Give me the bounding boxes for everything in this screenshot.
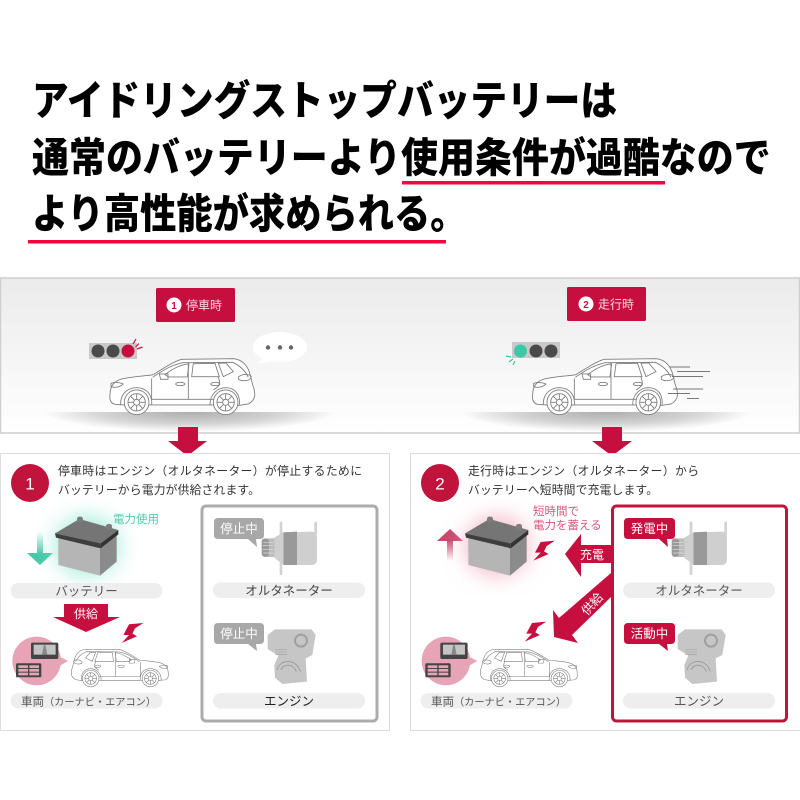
label pill: alternator <box>213 582 365 598</box>
bubble: generating: 発電中 <box>631 521 668 536</box>
glow: battery <box>467 519 527 573</box>
badge: stopped: 停車時 <box>186 298 222 312</box>
glow: battery <box>57 519 117 573</box>
speed lines <box>668 367 710 398</box>
label pill: engine: エンジン <box>264 694 314 708</box>
title underline: second line <box>28 240 446 244</box>
title: アイドリングストップバッテリーは <box>32 78 617 124</box>
bubble: active <box>624 623 675 651</box>
number badge 2: 2 <box>435 474 445 494</box>
panel: scene overview <box>0 278 800 433</box>
description text <box>58 464 362 497</box>
label pill: battery: バッテリー <box>55 584 118 598</box>
box: alternator and engine active <box>612 506 786 721</box>
bubble: stopped: 停止中 <box>220 521 258 536</box>
car: vehicle <box>480 649 577 687</box>
label: store power: 短時間で <box>533 505 579 518</box>
arrow: supply: 供給 <box>74 607 98 621</box>
box: alternator and engine stopped <box>202 506 377 721</box>
icon: alternator <box>262 522 317 575</box>
icon: navigation and air conditioner <box>12 637 68 685</box>
arrow: down to panel 2 <box>592 427 632 456</box>
icon: green traffic light <box>506 342 560 365</box>
panel 2: driving <box>410 454 800 730</box>
icon: lightning <box>525 622 546 642</box>
badge: driving <box>567 287 646 321</box>
bubble: active: 活動中 <box>631 626 668 641</box>
icon: lightning <box>122 623 143 643</box>
label: store power <box>533 505 602 532</box>
title <box>32 78 771 238</box>
arrow: charge: 充電 <box>580 548 604 562</box>
title underline: first line <box>402 181 665 184</box>
ground shadow: stopped car <box>40 412 340 432</box>
icon: navigation and air conditioner <box>422 637 477 685</box>
arrow: supply <box>53 604 120 632</box>
bubble: stopped <box>214 518 264 547</box>
arrow: supply diagonal: 供給 <box>579 590 606 618</box>
badge: driving: 2 <box>583 300 589 311</box>
number badge 2 <box>421 464 459 502</box>
badge: stopped <box>156 288 235 322</box>
label pill: vehicle <box>420 693 572 708</box>
description text: 停車時はエンジン（オルタネーター）が停止するために <box>58 464 362 478</box>
ground shadow: moving car <box>457 412 755 432</box>
icon: down arrow <box>27 532 53 565</box>
icon: battery <box>465 517 528 576</box>
car: vehicle <box>71 649 168 687</box>
number badge 1 <box>11 464 49 502</box>
title: より高性能が求められる。 <box>32 191 467 238</box>
label pill: alternator: オルタネーター <box>655 584 743 598</box>
icon: engine <box>678 629 726 684</box>
label pill: vehicle: 車両（カーナビ・エアコン） <box>21 694 156 708</box>
icon: alternator <box>672 522 727 575</box>
description text <box>468 464 699 497</box>
label pill: engine: エンジン <box>674 694 724 708</box>
icon: lightning <box>533 541 555 561</box>
icon: up arrow <box>437 529 463 561</box>
arrow: down to panel 1 <box>168 427 207 456</box>
bubble: stopped: 停止中 <box>220 626 258 641</box>
car: driving <box>532 359 677 415</box>
label pill: engine <box>623 693 775 708</box>
badge: stopped: 1 <box>171 301 177 312</box>
panel 1: stopped <box>0 454 390 730</box>
label pill: engine <box>213 693 365 708</box>
label pill: vehicle: 車両（カーナビ・エアコン） <box>431 694 566 708</box>
label: store power: 電力を蓄える <box>533 519 602 532</box>
label pill: alternator: オルタネーター <box>245 584 333 598</box>
icon: red traffic light <box>89 339 142 359</box>
bubble: generating <box>624 518 675 547</box>
label pill: alternator <box>623 582 775 598</box>
label pill: battery <box>10 583 162 598</box>
description text: バッテリーへ短時間で充電します。 <box>468 483 658 497</box>
speech bubble <box>253 332 307 364</box>
badge: driving: 走行時 <box>598 298 634 312</box>
title: 通常のバッテリーより使用条件が過酷なので <box>32 135 771 181</box>
number badge 1: 1 <box>25 474 35 494</box>
label: power use: 電力使用 <box>113 512 159 526</box>
arrow: charge <box>565 534 611 577</box>
icon: engine <box>268 629 316 684</box>
car: stopped <box>110 359 255 415</box>
bubble: stopped <box>214 623 264 651</box>
description text: 走行時はエンジン（オルタネーター）から <box>468 464 699 478</box>
description text: バッテリーから電力が供給されます。 <box>58 483 260 497</box>
label pill: vehicle <box>10 693 162 708</box>
arrow: supply diagonal <box>553 573 611 643</box>
icon: battery <box>55 517 118 576</box>
